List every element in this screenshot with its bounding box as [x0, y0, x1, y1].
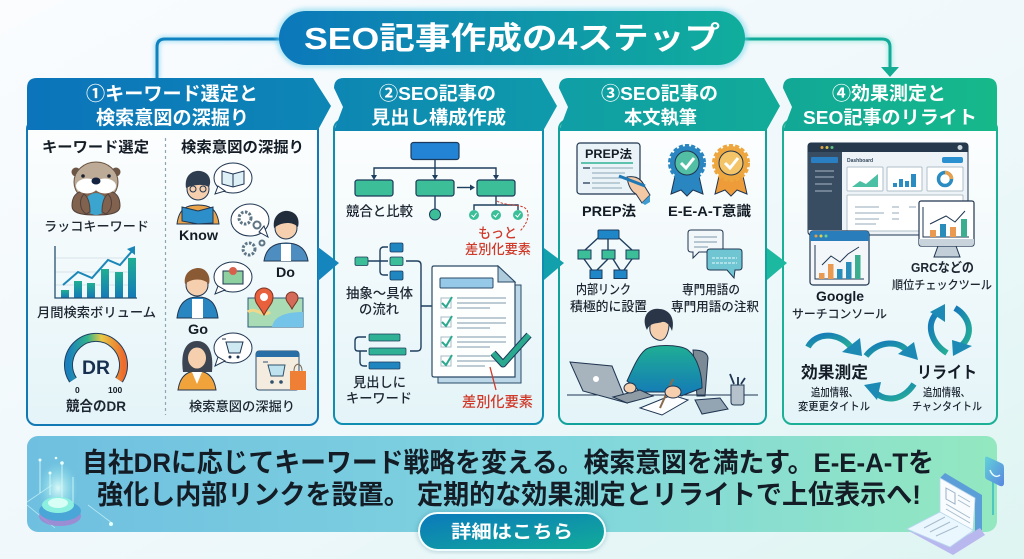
persona: go	[177, 262, 252, 337]
persona: buy	[178, 333, 252, 390]
summary text: 自社DRに応じてキーワード戦略を変える。検索意図を満たす。E-E-A-Tを	[82, 448, 934, 478]
gauge: competitor DR	[68, 337, 124, 395]
label: GRC: GRCなどの	[911, 260, 974, 275]
illustration: hologram platform	[27, 457, 113, 528]
step 1 header	[27, 78, 331, 130]
arrow: step 3 to 4	[767, 248, 787, 280]
step 3 header: 本文執筆	[624, 107, 697, 128]
label: search console: サーチコンソール	[792, 307, 887, 321]
panel: step 2 heading structure	[334, 78, 557, 424]
subheading: keyword selection: キーワード選定	[42, 139, 149, 156]
label: GRC	[892, 260, 992, 292]
arrow: title to step 4	[740, 39, 899, 77]
arrow: step 2 to 3	[544, 248, 564, 280]
step 2 header: ②SEO記事の	[379, 83, 496, 104]
icon: online shop window and bag	[256, 351, 306, 390]
chart: monthly search volume	[55, 246, 137, 298]
step 3 header	[559, 78, 780, 131]
label: search console: Google	[816, 288, 864, 304]
diagram: abstract to concrete flow	[355, 243, 403, 280]
label: keyword in headings: 見出しに	[353, 375, 406, 390]
panel: step 3 body writing	[559, 78, 780, 424]
diagram: keyword in headings	[355, 334, 406, 369]
icon: cycle arrowheads	[842, 304, 972, 400]
label: abstract to concrete	[346, 285, 413, 317]
persona: do	[231, 204, 308, 280]
icon: document with checklist	[432, 266, 529, 383]
gauge: competitor DR: 0	[75, 385, 80, 395]
icon: orange badge	[714, 146, 748, 196]
label: internal links: 積極的に設置	[570, 299, 647, 314]
label: search intent: 検索意図の深掘り	[189, 399, 295, 414]
gauge: competitor DR: 100	[108, 385, 122, 395]
icon: map with pins	[248, 288, 303, 327]
gauge: competitor DR: DR	[82, 358, 110, 379]
label: compare with competitors: 競合と比較	[346, 204, 413, 219]
label: rewrite	[912, 364, 982, 413]
button: details	[417, 511, 607, 552]
icon: sea otter	[72, 162, 120, 215]
label: measurement: 変更更タイトル	[798, 399, 870, 413]
icon: analytics dashboard: Dashboard	[847, 158, 873, 164]
label: technical term notes: 専門用語の	[682, 283, 740, 297]
summary text: 強化し内部リンクを設置。 定期的な効果測定とリライトで上位表示へ!	[97, 480, 921, 510]
label: monthly search volume: 月間検索ボリューム	[37, 305, 156, 320]
step 3 header: ③SEO記事の	[601, 83, 718, 104]
label: internal links	[570, 282, 647, 314]
step 4 header: SEO記事のリライト	[803, 107, 977, 128]
label: E-E-A-T: E-E-A-T意識	[668, 203, 751, 219]
button: details: 詳細はこちら	[451, 522, 573, 542]
label: measurement	[798, 363, 870, 413]
summary text	[82, 448, 934, 510]
label: rewrite: 追加情報、	[923, 385, 970, 399]
connector: title to step 1	[157, 39, 285, 80]
label: technical term notes	[671, 283, 759, 314]
icon: PREP card	[577, 143, 650, 205]
step 2 header: 見出し構成作成	[371, 107, 506, 128]
label: rewrite: チャンタイトル	[912, 400, 982, 413]
step 4 header	[783, 78, 997, 131]
label: keyword in headings: キーワード	[346, 391, 412, 406]
icon: analytics dashboard	[808, 143, 968, 235]
label: differentiation: 差別化要素	[462, 394, 533, 411]
label: technical term notes: 専門用語の注釈	[671, 299, 759, 314]
icon: PREP card: PREP法	[585, 147, 633, 161]
icon: rewrite cycle arrows	[808, 308, 969, 399]
label: abstract to concrete: 抽象～具体	[346, 285, 413, 301]
step 4 header: ④効果測定と	[832, 83, 946, 104]
icon: search console window	[810, 231, 869, 285]
label: measurement: 効果測定	[801, 363, 868, 382]
panel: summary banner	[27, 436, 997, 532]
persona: go: Go	[188, 321, 208, 337]
panel: step 1 keyword selection	[27, 78, 331, 425]
callout: more differentiation: もっと	[478, 225, 517, 241]
label: PREP: PREP法	[582, 203, 636, 219]
icon: GRC rank checker monitor	[919, 201, 974, 257]
persona: know	[177, 163, 252, 243]
persona: do: Do	[276, 264, 295, 280]
label: search console	[792, 288, 887, 321]
icon: annotation chat bubbles	[688, 230, 742, 278]
title: SEO記事作成の4ステップ	[304, 21, 720, 56]
callout: more differentiation	[465, 201, 531, 257]
label: rakko keyword: ラッコキーワード	[44, 219, 149, 234]
illustration: open document on laptop	[907, 457, 1004, 555]
title	[276, 8, 748, 68]
label: measurement: 追加情報、	[811, 385, 858, 399]
persona: know: Know	[179, 227, 218, 243]
subheading: search intent: 検索意図の深掘り	[181, 138, 304, 156]
label: competitor DR: 競合のDR	[66, 398, 126, 414]
label: keyword in headings	[346, 375, 412, 406]
icon: blue badge	[670, 146, 704, 196]
illustration: person writing at laptop	[567, 309, 758, 415]
arrow: step 1 to 2	[318, 247, 339, 281]
icon: internal link network	[578, 230, 639, 278]
step 2 header	[334, 78, 557, 131]
step 1 header: ①キーワード選定と	[86, 83, 258, 105]
step 1 header: 検索意図の深掘り	[96, 107, 249, 129]
label: GRC: 順位チェックツール	[892, 278, 992, 292]
panel: step 4 measurement and rewrite	[783, 78, 997, 424]
callout: more differentiation: 差別化要素	[465, 242, 531, 257]
diagram: competitor comparison tree	[355, 142, 523, 220]
label: internal links: 内部リンク	[576, 282, 631, 297]
label: abstract to concrete: の流れ	[359, 302, 399, 317]
label: rewrite: リライト	[917, 364, 977, 382]
